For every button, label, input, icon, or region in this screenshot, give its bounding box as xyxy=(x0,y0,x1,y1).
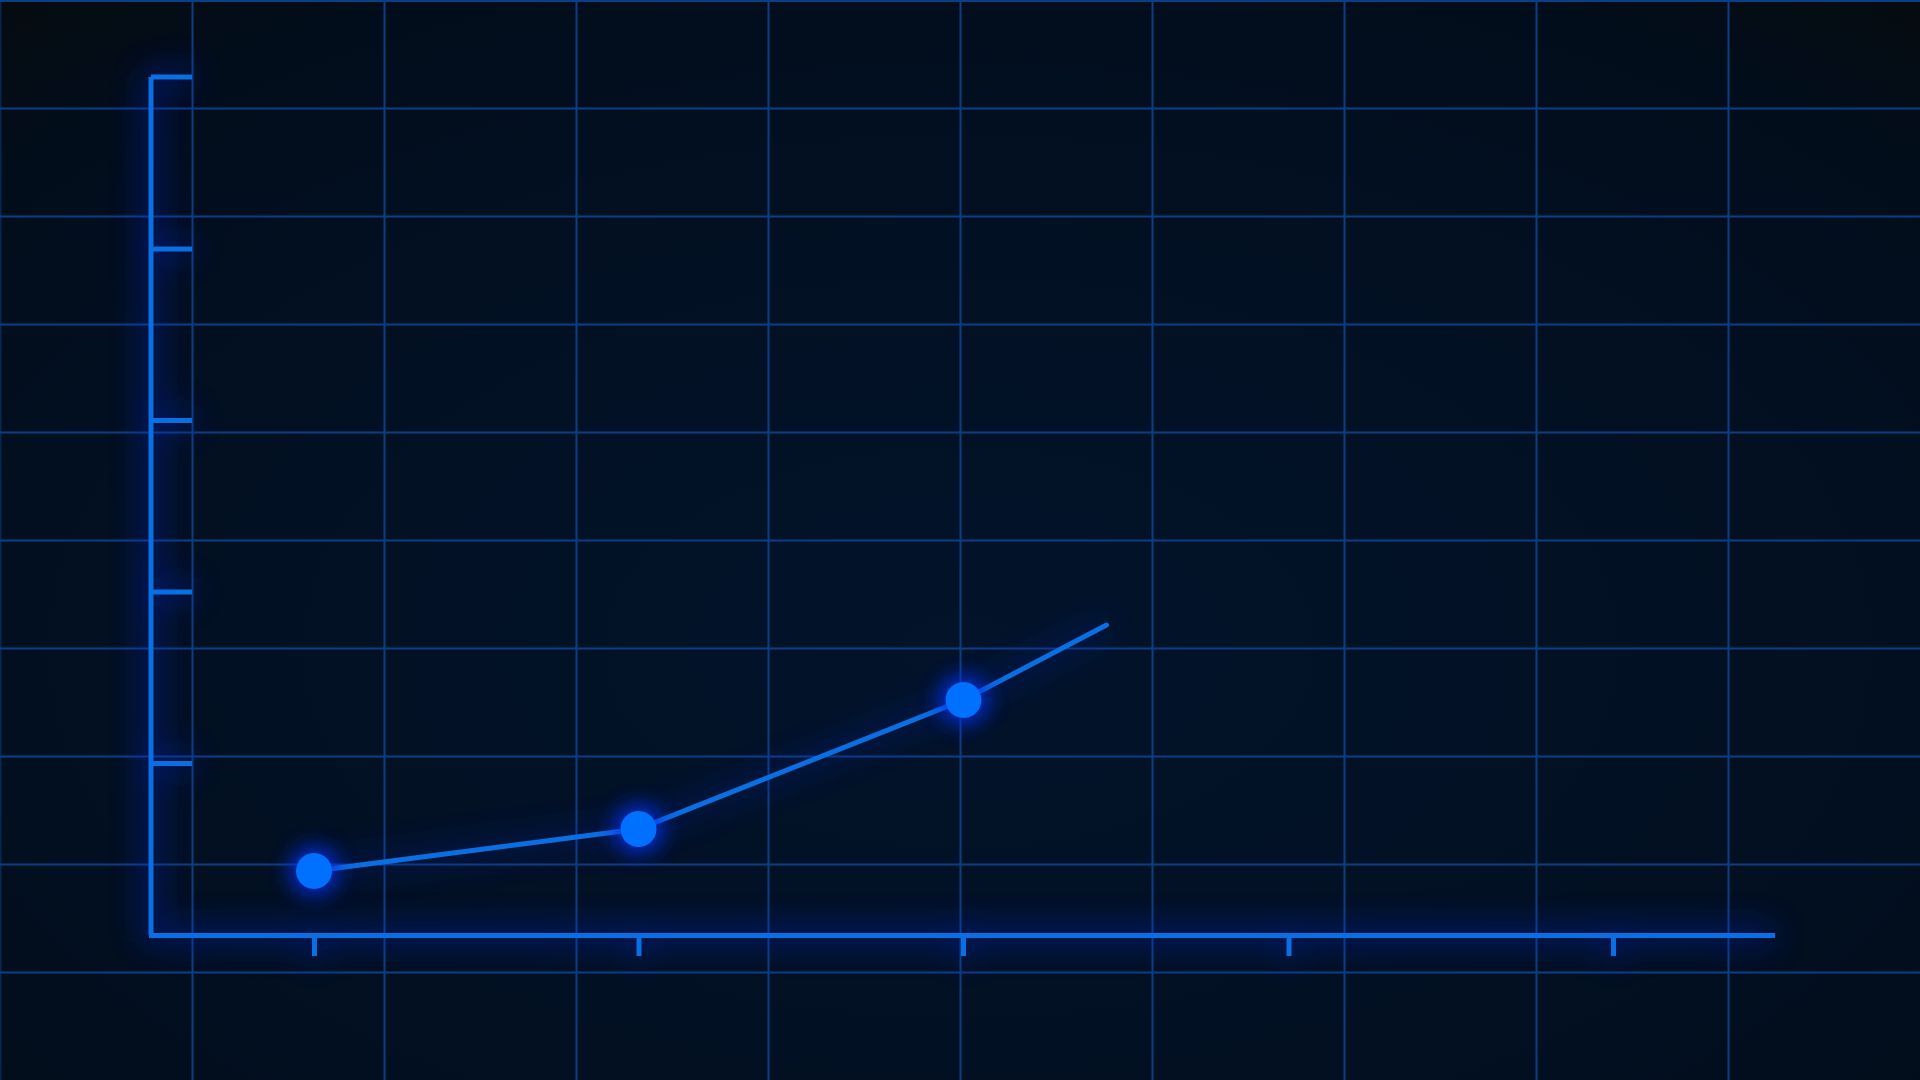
axes glow xyxy=(151,77,1775,956)
x axis xyxy=(149,933,1775,938)
y axis ticks xyxy=(151,77,192,764)
x axis ticks xyxy=(314,935,1614,956)
data point 2 xyxy=(614,805,662,853)
data point 3 xyxy=(940,676,988,724)
chart axes xyxy=(149,77,1775,956)
y axis xyxy=(148,77,154,935)
line stroke xyxy=(314,625,1106,871)
data line xyxy=(314,625,1106,871)
data point 1 xyxy=(290,847,338,895)
line glow xyxy=(314,625,1106,871)
